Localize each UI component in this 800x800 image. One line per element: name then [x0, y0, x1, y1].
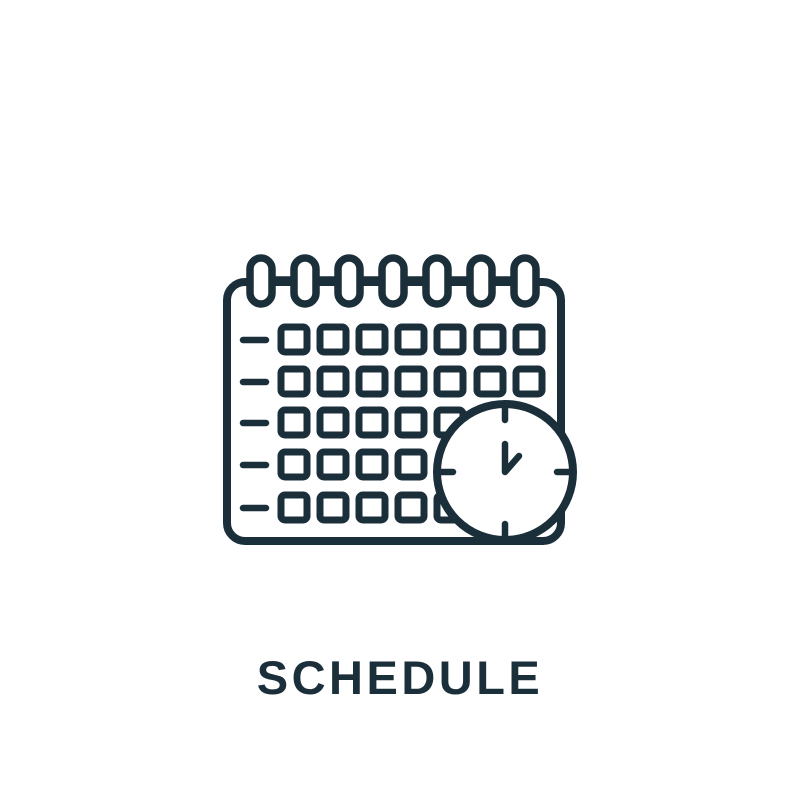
calendar body — [227, 282, 561, 541]
icon: clock — [437, 404, 573, 540]
icon: calendar — [227, 258, 561, 541]
row dashes — [243, 340, 266, 508]
calendar rings — [250, 258, 536, 304]
day grid — [281, 327, 542, 520]
title: SCHEDULE — [257, 651, 543, 704]
